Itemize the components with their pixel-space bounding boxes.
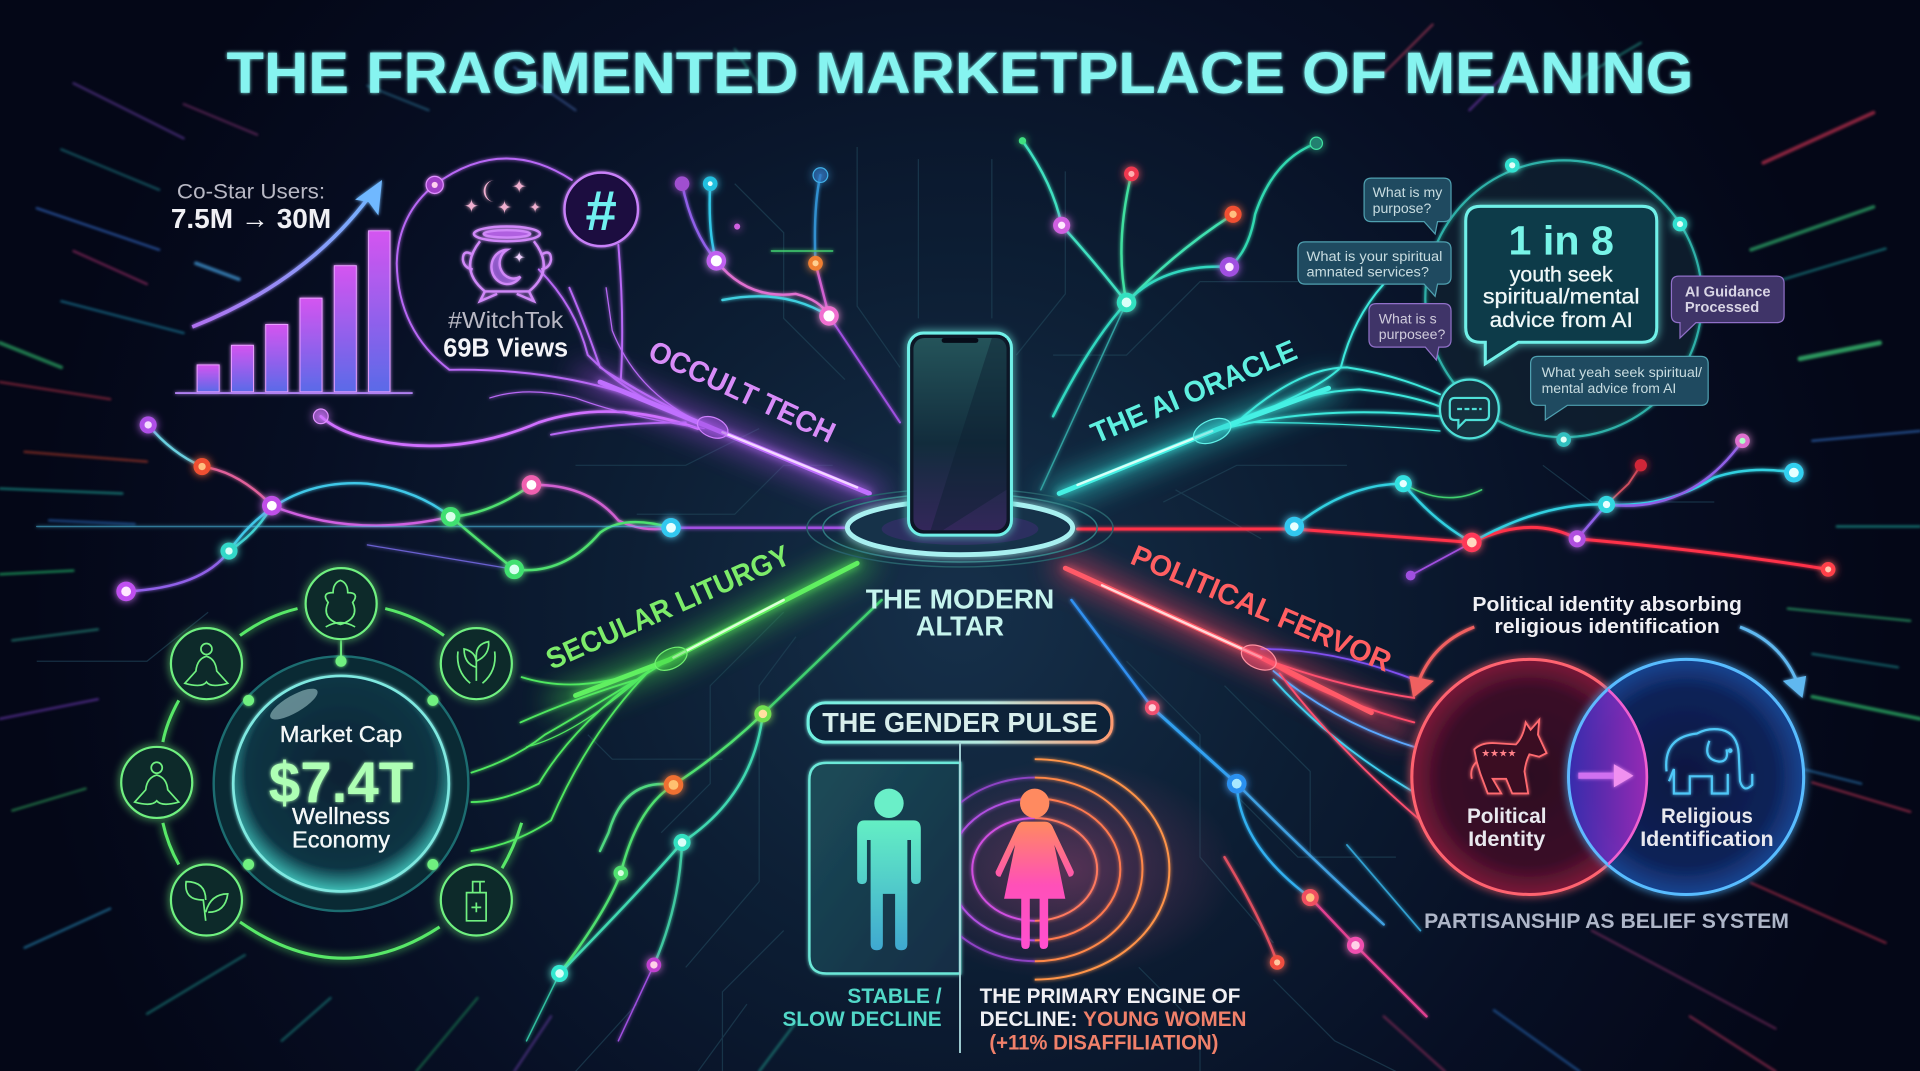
co-star users text: 7.5M → 30M bbox=[171, 203, 331, 234]
bubble: spiritual services bbox=[1298, 242, 1451, 296]
icon: hashtag: # bbox=[586, 179, 617, 242]
label: the modern altar bbox=[866, 584, 1054, 642]
venn circle: religious bbox=[1569, 659, 1804, 894]
beam: AI oracle bbox=[1053, 284, 1440, 496]
co-star users text: Co-Star Users: bbox=[177, 180, 325, 203]
venn overlap bbox=[1568, 688, 1648, 866]
arrow: identity transfer bbox=[1578, 764, 1633, 787]
icon: meditating figure upper left bbox=[171, 628, 242, 699]
label: the AI oracle: THE AI ORACLE bbox=[1086, 334, 1302, 450]
male panel bbox=[809, 763, 960, 973]
panel: gender pulse bbox=[782, 703, 1247, 1054]
callout: 1 in 8 bbox=[1466, 206, 1657, 364]
label: political fervor: POLITICAL FERVOR bbox=[1126, 539, 1396, 679]
network: right nodes bbox=[1078, 433, 1836, 580]
bubble: youth advice bbox=[1531, 356, 1708, 420]
bubble: AI guidance processed bbox=[1671, 276, 1784, 338]
network: bottom left nodes bbox=[527, 600, 882, 1041]
bubble: youth advice: What yeah seek spiritual/ bbox=[1542, 364, 1702, 380]
growth bar chart bbox=[175, 231, 413, 393]
inner orb: Market Cap bbox=[280, 721, 402, 747]
caption: primary engine: DECLINE: YOUNG WOMEN bbox=[980, 1008, 1247, 1031]
icon: moon and stars bbox=[464, 179, 541, 214]
label: political identity bbox=[1467, 804, 1547, 851]
inner orb: Wellness bbox=[292, 803, 390, 829]
inner orb: Economy bbox=[292, 826, 391, 852]
witchtok text bbox=[443, 307, 568, 362]
callout: 1 in 8: 1 in 8 bbox=[1509, 218, 1614, 264]
platform bbox=[807, 489, 1113, 567]
caption: stable slow decline bbox=[782, 985, 942, 1031]
icon: chat circle bbox=[1440, 380, 1499, 438]
callout: 1 in 8: advice from AI bbox=[1490, 309, 1633, 332]
heading text: Political identity absorbing bbox=[1472, 594, 1742, 616]
bubble: AI guidance processed: Processed bbox=[1685, 300, 1759, 316]
label: secular liturgy: SECULAR LITURGY bbox=[541, 539, 796, 676]
network: top centre left nodes bbox=[675, 168, 900, 422]
icon: hands with sprout bbox=[441, 628, 512, 699]
venn circle: political bbox=[1412, 659, 1647, 894]
orbit circle bbox=[1425, 160, 1702, 437]
label: occult tech: OCCULT TECH bbox=[643, 334, 840, 450]
bubble: spiritual services: What is your spiritual bbox=[1307, 249, 1442, 264]
heading pill: THE GENDER PULSE bbox=[822, 707, 1098, 738]
bubble: what is purpose purple bbox=[1369, 304, 1451, 360]
divider bbox=[959, 742, 961, 1053]
network: top centre right nodes bbox=[1019, 137, 1322, 490]
beam: secular liturgy bbox=[471, 561, 863, 851]
bubble: spiritual services: amnated services? bbox=[1307, 265, 1429, 280]
label: the modern altar: ALTAR bbox=[916, 611, 1004, 642]
panel: secular liturgy bbox=[121, 539, 796, 958]
caption: primary engine: (+11% DISAFFILIATION) bbox=[989, 1031, 1218, 1054]
network: bottom right nodes bbox=[1071, 600, 1427, 1016]
label: political identity: Political bbox=[1467, 804, 1547, 828]
label: religious identification: Religious bbox=[1661, 804, 1753, 828]
icon: cauldron bbox=[463, 227, 551, 301]
icon: donkey: ★★★★ bbox=[1481, 749, 1517, 760]
female pulse bbox=[961, 755, 1216, 984]
icon: elephant bbox=[1666, 729, 1752, 793]
callout: 1 in 8: youth seek bbox=[1510, 264, 1613, 287]
icon: hashtag bbox=[564, 173, 638, 246]
beam: political fervor bbox=[1063, 566, 1420, 820]
panel: AI oracle bbox=[1086, 158, 1784, 450]
bubble: what is purpose purple: purposee? bbox=[1379, 326, 1445, 342]
caption: primary engine: THE PRIMARY ENGINE OF bbox=[980, 985, 1240, 1008]
label: the modern altar: THE MODERN bbox=[866, 584, 1054, 615]
witchtok text: 69B Views bbox=[443, 334, 568, 362]
witchtok text: #WitchTok bbox=[448, 307, 564, 333]
node: occult top bbox=[426, 176, 443, 193]
co-star users text bbox=[171, 180, 331, 234]
inner orb bbox=[214, 656, 468, 911]
label: religious identification bbox=[1640, 804, 1774, 851]
caption: stable slow decline: STABLE / bbox=[847, 985, 942, 1008]
heading text bbox=[1472, 594, 1742, 638]
central altar bbox=[807, 333, 1113, 642]
bubble: what is my purpose: What is my bbox=[1373, 184, 1443, 200]
label: political identity: Identity bbox=[1468, 827, 1545, 851]
bubble: what is my purpose bbox=[1364, 178, 1451, 234]
bubble: youth advice: mental advice from AI bbox=[1542, 380, 1676, 396]
arrow: user growth bbox=[192, 180, 382, 327]
label: religious identification: Identification bbox=[1640, 827, 1774, 851]
beam: occult tech bbox=[321, 159, 876, 496]
heading text: religious identification bbox=[1494, 616, 1720, 638]
icon: bottle bbox=[441, 864, 512, 936]
inner orb: $7.4T bbox=[269, 751, 413, 815]
panel: occult tech bbox=[171, 173, 840, 450]
bubble: AI guidance processed: AI Guidance bbox=[1685, 284, 1771, 300]
callout: 1 in 8: spiritual/mental bbox=[1483, 286, 1640, 309]
caption: primary engine bbox=[980, 985, 1247, 1054]
connector nodes bbox=[243, 640, 438, 870]
arrow: left curve bbox=[1409, 627, 1474, 698]
icon: leaves lower left bbox=[171, 864, 242, 936]
icon: plant bbox=[306, 568, 377, 639]
icon: donkey bbox=[1471, 720, 1547, 793]
network: upper left nodes bbox=[37, 409, 845, 601]
phone bbox=[909, 333, 1011, 535]
panel: political fervor bbox=[1126, 539, 1806, 933]
caption: partisanship: PARTISANSHIP AS BELIEF SYSTEM bbox=[1424, 909, 1789, 933]
bubble: what is my purpose: purpose? bbox=[1373, 200, 1432, 216]
caption: stable slow decline: SLOW DECLINE bbox=[782, 1008, 942, 1031]
outer ring bbox=[163, 609, 522, 958]
title: THE FRAGMENTED MARKETPLACE OF MEANING bbox=[227, 41, 1693, 106]
icon: meditating figure left bbox=[121, 747, 192, 818]
arrow: right curve bbox=[1740, 627, 1806, 698]
orbit nodes bbox=[1505, 158, 1687, 447]
bubble: what is purpose purple: What is s bbox=[1379, 310, 1437, 326]
